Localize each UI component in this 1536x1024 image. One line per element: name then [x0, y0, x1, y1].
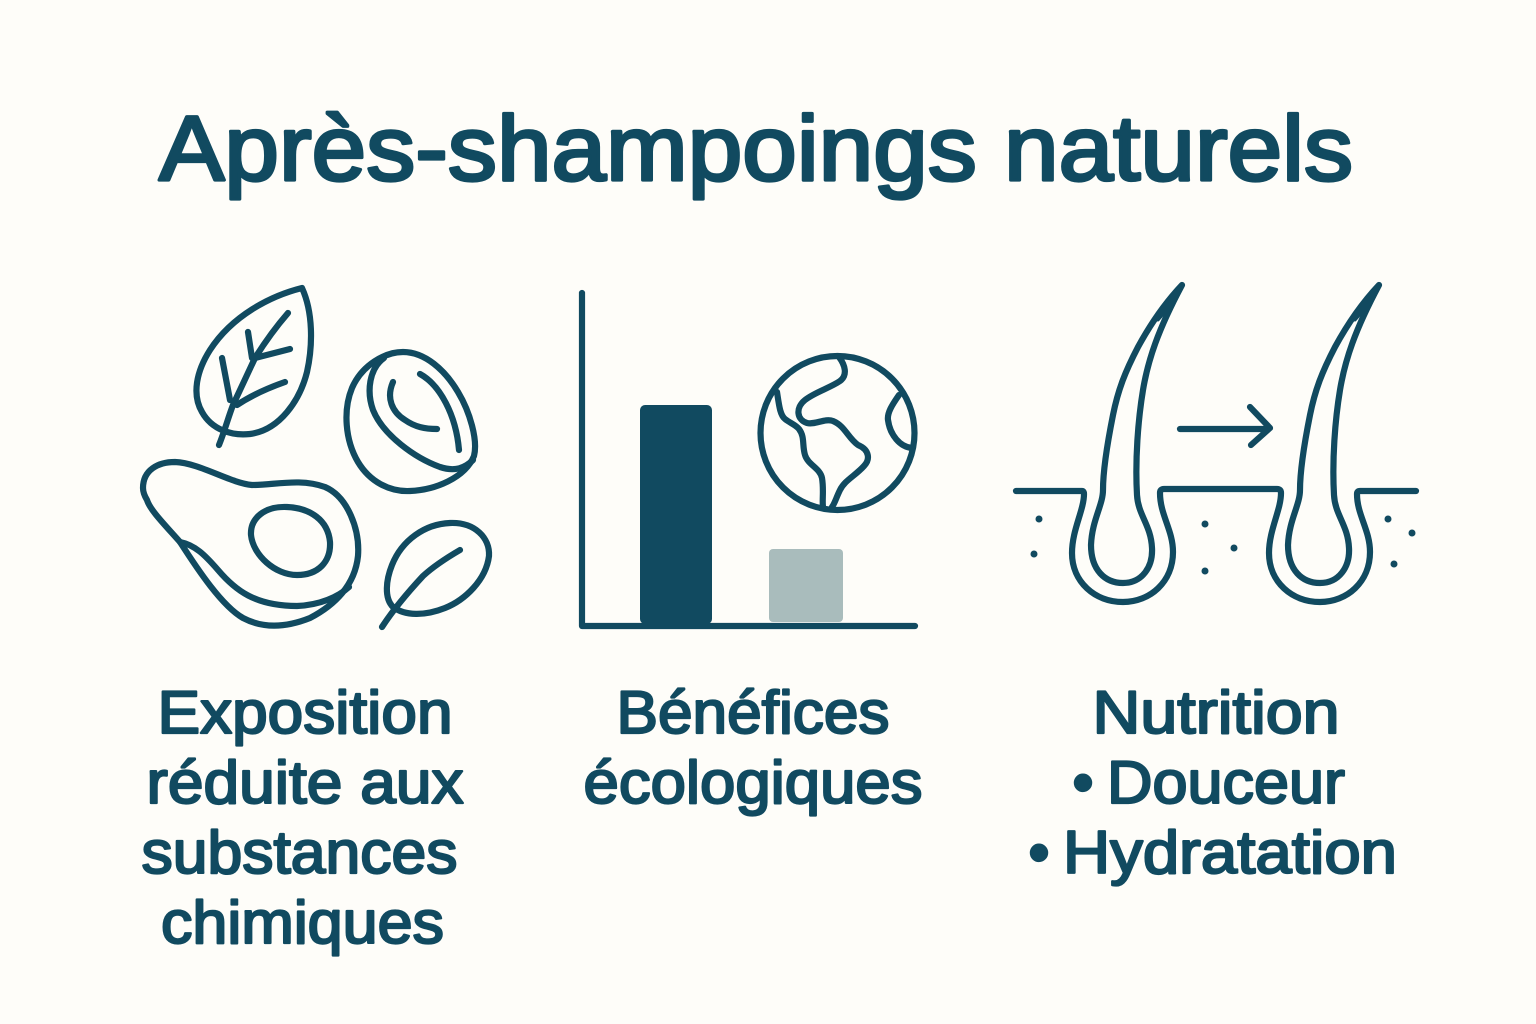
- text: ecological benefits: Bénéfices: [616, 679, 890, 746]
- text: chemical exposure: chimiques: [161, 889, 444, 956]
- text: ecological benefits: écologiques: [584, 749, 922, 816]
- icon: small leaf: [382, 523, 489, 627]
- text: chemical exposure: substances: [142, 819, 458, 886]
- icon: hair follicles: [1016, 285, 1416, 602]
- text: chemical exposure: Exposition: [158, 679, 452, 746]
- text: ecological benefits: [584, 679, 922, 816]
- scalp dots: [1030, 516, 1416, 574]
- text: nutrition: •: [1072, 749, 1094, 816]
- chart: ecological benefits: [582, 293, 915, 626]
- icon: nut: [346, 352, 475, 491]
- skin line: [1016, 489, 1416, 602]
- text: nutrition: •: [1028, 819, 1050, 886]
- hair left: [1091, 285, 1182, 583]
- bar: dark: [640, 405, 712, 624]
- icon: large leaf: [196, 288, 311, 445]
- bar: light: [769, 549, 843, 622]
- arrow: [1180, 407, 1270, 445]
- chart axes: [582, 293, 915, 626]
- text: nutrition: [1028, 679, 1397, 886]
- text: chemical exposure: réduite aux: [146, 749, 464, 816]
- title: Après-shampoings naturels: [159, 98, 1353, 200]
- text: chemical exposure: [142, 679, 464, 956]
- icon: natural ingredients: [143, 288, 489, 627]
- text: nutrition: Hydratation: [1063, 819, 1397, 886]
- icon: globe: [760, 356, 914, 510]
- text: nutrition: Nutrition: [1092, 679, 1340, 746]
- text: nutrition: Douceur: [1107, 749, 1345, 816]
- icon: avocado: [143, 462, 358, 626]
- hair right: [1288, 285, 1379, 583]
